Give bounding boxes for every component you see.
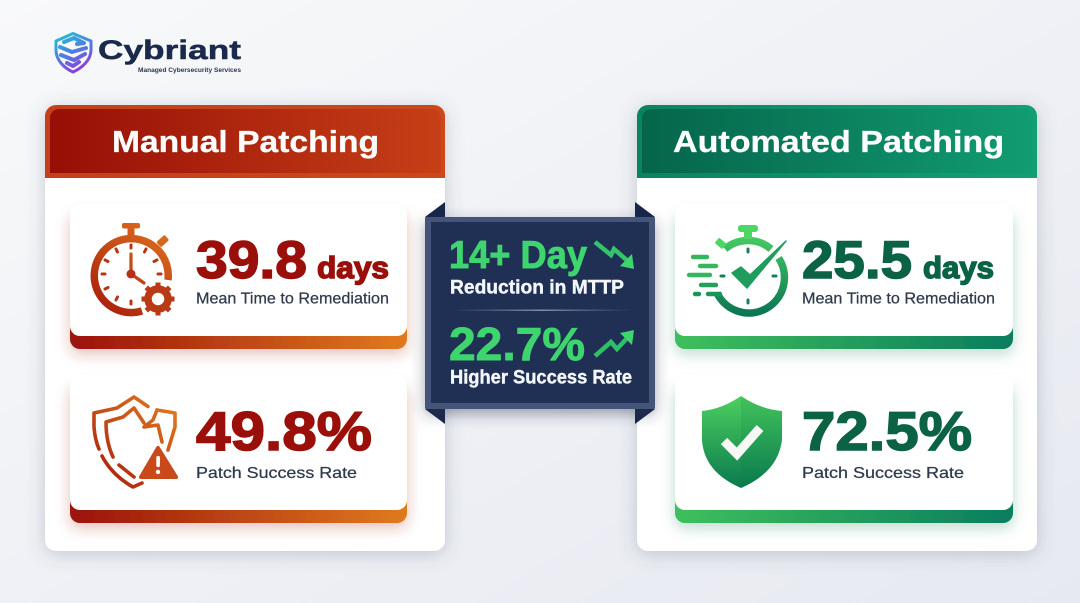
header band — [637, 105, 1037, 178]
icon: down trend arrow — [595, 242, 634, 269]
logo: Cybriant — [56, 34, 241, 74]
icon: stopwatch with gear — [94, 223, 177, 318]
label: Mean Time to Remediation — [802, 290, 995, 308]
panel body — [45, 105, 445, 551]
label: Patch Success Rate — [802, 465, 964, 482]
label: Patch Success Rate — [196, 465, 357, 482]
label: Higher Success Rate — [450, 368, 632, 388]
ribbon tabs — [425, 202, 655, 424]
card: mean time to remediation, manual — [70, 204, 407, 349]
stat: 22.7%: 22.7% — [449, 318, 585, 370]
center comparison banner — [425, 202, 655, 424]
icon: green shield with check — [702, 396, 782, 488]
metric: 49.8%: 49.8% — [196, 400, 372, 462]
logo tagline: Managed Cybersecurity Services — [138, 67, 241, 74]
card: mean time to remediation, manual: days — [317, 250, 389, 285]
metric: 72.5%: 72.5% — [802, 400, 972, 462]
metric: 39.8 days: 39.8 — [196, 231, 307, 290]
metric: 25.5 days: 25.5 — [802, 231, 912, 290]
label: Mean Time to Remediation — [196, 290, 389, 308]
panel body — [637, 105, 1037, 551]
logo wordmark: Cybriant — [98, 35, 241, 65]
heading: Automated Patching — [673, 124, 1004, 159]
panel: Automated Patching — [637, 105, 1037, 551]
icon: logo shield — [56, 34, 91, 72]
card: mean time to remediation, automated — [675, 204, 1013, 349]
card: mean time to remediation, automated: days — [923, 250, 994, 285]
card: patch success rate, automated — [675, 375, 1013, 523]
label: Reduction in MTTP — [450, 278, 624, 298]
stat: 14+ day: 14+ Day — [449, 234, 587, 277]
icon: cracked shield with warning — [94, 397, 176, 487]
card: patch success rate, manual — [70, 375, 407, 523]
heading: Manual Patching — [112, 124, 379, 159]
header band — [45, 105, 445, 178]
icon: up trend arrow — [595, 330, 634, 356]
icon: stopwatch with checkmark — [689, 225, 786, 313]
banner box — [425, 217, 655, 409]
panel: Manual Patching — [45, 105, 445, 551]
